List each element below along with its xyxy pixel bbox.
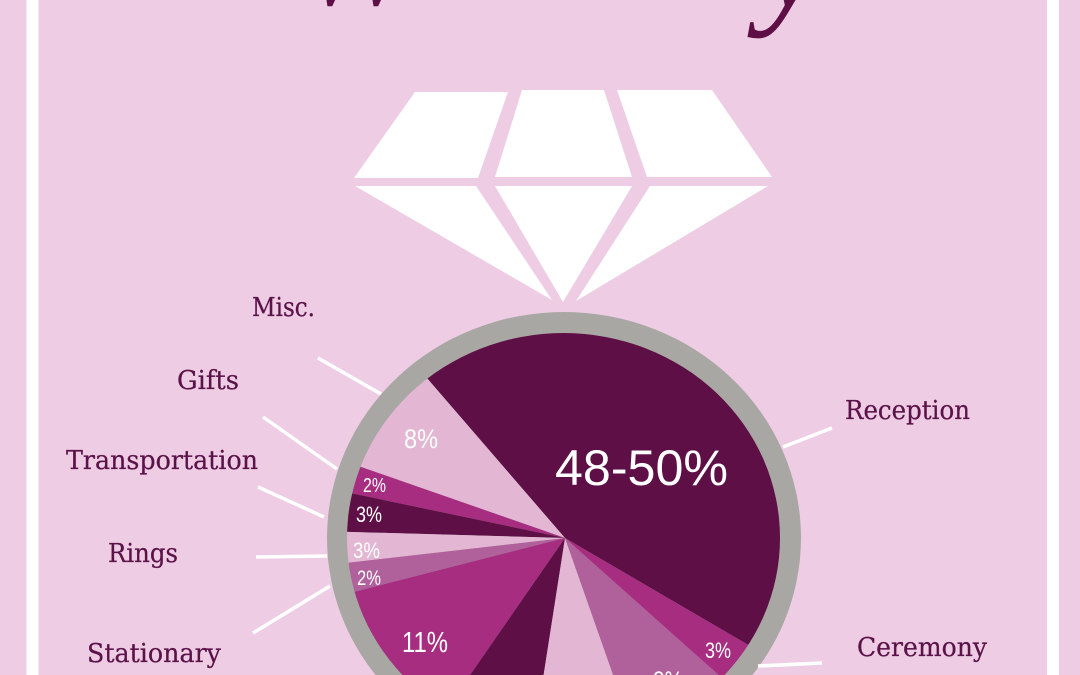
icon: diamond — [354, 90, 772, 302]
leader lines — [253, 358, 832, 666]
slice: eleven percent: 11% — [402, 627, 448, 659]
slice: misc — [360, 378, 565, 538]
slice: stationary: 2% — [357, 567, 381, 590]
slice: transportation — [347, 494, 565, 538]
label: Rings: Rings — [108, 539, 178, 569]
label: Misc.: Misc. — [252, 293, 315, 323]
slice: gifts — [352, 466, 564, 538]
slice: eleven percent — [354, 538, 565, 675]
slice: rings — [347, 532, 564, 562]
label: Stationary: Stationary — [87, 639, 221, 669]
label: Transportation: Transportation — [66, 446, 258, 476]
label: Gifts: Gifts — [177, 366, 239, 396]
slice: stationary — [348, 538, 564, 592]
slice: ceremony: 3% — [705, 638, 731, 663]
slice: dark lower — [470, 538, 565, 675]
slice: reception: 48-50% — [555, 440, 728, 496]
label: Ceremony: Ceremony — [857, 633, 987, 663]
slice: misc: 8% — [404, 424, 438, 454]
slice: mauve lower — [565, 538, 718, 675]
slice: rings: 3% — [353, 538, 380, 563]
slice: ceremony — [565, 538, 748, 675]
pie chart — [347, 333, 780, 675]
label: Reception: Reception — [845, 396, 970, 426]
ring band — [327, 312, 801, 675]
title, cropped by the top edge — [295, 0, 827, 39]
slice: transportation: 3% — [356, 502, 382, 527]
slice: gifts: 2% — [363, 475, 386, 497]
slice: light lower — [544, 538, 613, 675]
